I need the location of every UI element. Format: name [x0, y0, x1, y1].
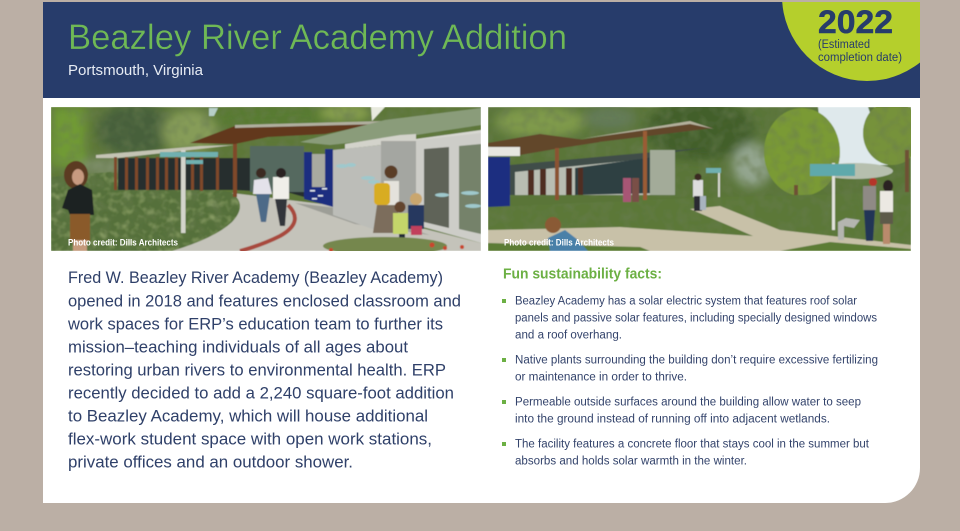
pavement	[172, 193, 481, 251]
fact: solar: Beazley Academy has a solar electric system that features roof solar	[515, 296, 857, 308]
photo: academy grounds and trails	[488, 100, 921, 251]
grass	[51, 172, 240, 251]
fact: concrete floor: absorbs and holds solar warmth in the winter.	[515, 456, 747, 468]
main description text: to Beazley Academy, which will house additional	[68, 406, 428, 426]
fact: permeable surfaces	[502, 396, 861, 426]
main description text: restoring urban rivers to environmental health. ERP	[68, 360, 446, 380]
woman in foreground	[64, 161, 88, 189]
subtitle: Portsmouth, Virginia	[68, 62, 204, 79]
facts heading: Fun sustainability facts:	[503, 266, 662, 282]
fact: permeable surfaces: into the ground instead of running off into adjacent wetlands.	[515, 414, 830, 426]
colonnade	[118, 158, 304, 197]
facts list	[502, 296, 878, 468]
couple and dog	[838, 218, 860, 240]
fact: solar	[502, 296, 877, 342]
people near building	[623, 178, 631, 202]
fact: concrete floor: The facility features a concrete floor that stays cool in the summer but	[515, 438, 870, 450]
blue panels	[304, 149, 333, 207]
photo: academy entrance walkway	[51, 104, 481, 255]
title: Beazley River Academy Addition	[68, 18, 567, 57]
photo credit: Photo credit: Dills Architects	[68, 238, 178, 248]
sky	[818, 107, 888, 165]
completion date badge	[782, 2, 920, 81]
grass	[492, 192, 910, 216]
fact: solar: panels and passive solar features, including specially designed windows	[515, 312, 877, 324]
fact: solar: and a roof overhang.	[515, 330, 622, 342]
boy	[545, 217, 561, 233]
main description text: mission–teaching individuals of all ages about	[68, 338, 408, 356]
main description text: private offices and an outdoor shower.	[68, 452, 353, 472]
completion date badge: 2022	[818, 4, 893, 40]
fact: permeable surfaces: Permeable outside surfaces around the building allow water to seep	[515, 396, 861, 408]
photo credit: Photo credit: Dills Architects	[504, 238, 614, 248]
building walls	[333, 145, 381, 232]
people by window	[384, 166, 398, 178]
fact: concrete floor	[502, 438, 870, 468]
signs	[718, 169, 720, 197]
main description text	[67, 268, 461, 472]
flowers	[322, 236, 448, 251]
fact: native plants: or maintenance in order to thrive.	[515, 372, 687, 384]
main description text: Fred W. Beazley River Academy (Beazley Academy)	[68, 268, 443, 287]
sign post	[181, 150, 186, 233]
walkers	[253, 178, 272, 194]
roofs	[190, 124, 367, 144]
main description text: flex-work student space with open work stations,	[68, 430, 432, 448]
fact: native plants	[502, 354, 878, 384]
building	[510, 148, 703, 195]
completion date badge: (Estimated	[818, 39, 870, 51]
fact: native plants: Native plants surrounding the building don’t require excessive fertilizing	[515, 354, 878, 366]
trees	[764, 107, 911, 196]
main description text: work spaces for ERP’s education team to further its	[67, 314, 443, 334]
header band	[43, 0, 952, 98]
blue box	[488, 147, 520, 156]
roofs	[488, 134, 600, 155]
main description text: recently decided to add a 2,240 square-foot addition	[68, 384, 454, 402]
completion date badge: completion date)	[818, 52, 902, 64]
main description text: opened in 2018 and features enclosed classroom and	[68, 292, 461, 310]
